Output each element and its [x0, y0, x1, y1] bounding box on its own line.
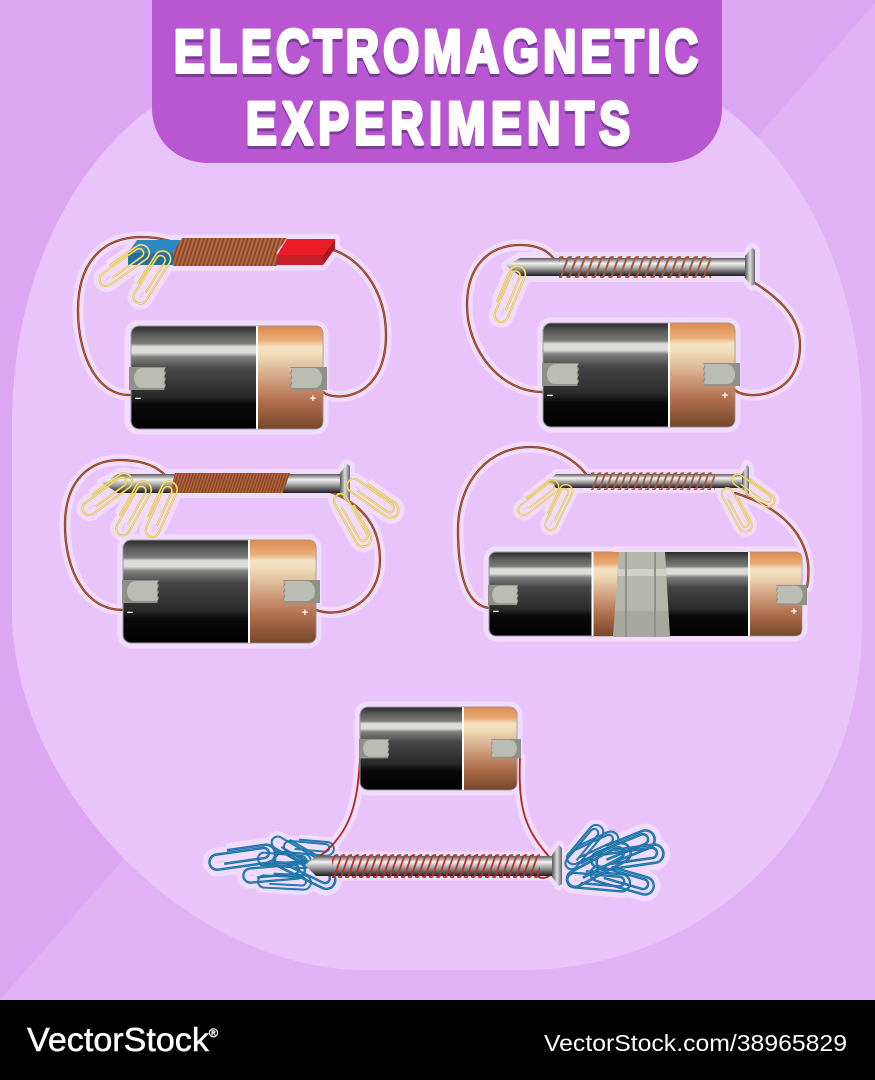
sticker outline: [208, 707, 665, 897]
battery: [129, 326, 327, 429]
battery: [542, 323, 740, 427]
central rounded panel: [12, 95, 862, 970]
nail: [548, 465, 749, 497]
battery: −: [127, 607, 133, 619]
title: ELECTROMAGNETIC: [174, 18, 698, 86]
blue paperclips left: [208, 832, 338, 892]
nail: [305, 845, 562, 886]
nail: [506, 248, 755, 286]
wires: [78, 237, 386, 396]
title: EXPERIMENTS: [246, 90, 630, 158]
battery: +: [722, 390, 728, 402]
paperclips: [95, 242, 174, 306]
two batteries taped together: [488, 552, 807, 637]
experiment 1: bar magnet electromagnet: [78, 237, 386, 429]
wires: [65, 460, 380, 613]
blue paperclips right: [561, 822, 665, 897]
footer logo: VectorStock: [27, 1021, 203, 1058]
wires: [320, 758, 554, 878]
bar magnet: [128, 239, 335, 265]
two batteries taped together: +: [791, 606, 797, 618]
sticker outline: [78, 237, 386, 429]
two batteries taped together: −: [493, 606, 499, 618]
footer logo: ®: [209, 1026, 218, 1040]
paperclip: [490, 264, 528, 324]
battery: −: [547, 390, 553, 402]
battery: [359, 707, 521, 790]
experiment 5: nail with many blue paperclips: [208, 707, 665, 897]
paperclips: [515, 470, 777, 534]
tape band: [613, 552, 670, 637]
battery: +: [310, 393, 316, 405]
title banner: [152, 0, 722, 163]
battery: −: [135, 393, 141, 405]
coil: [559, 256, 711, 278]
coil: [170, 473, 290, 493]
footer image id: VectorStock.com/38965829: [544, 1030, 847, 1056]
coil: [591, 472, 715, 490]
experiment 4: two batteries, four paperclips: [458, 447, 808, 637]
experiment 2: nail with one paperclip: [467, 245, 800, 427]
coil: [332, 854, 540, 878]
battery: +: [302, 607, 308, 619]
title: [174, 18, 698, 158]
battery: [122, 540, 320, 643]
wires: [467, 245, 800, 395]
wires: [458, 447, 808, 608]
paperclips: [78, 470, 402, 549]
sticker outline: [458, 447, 808, 636]
experiment 3: nail with five paperclips: [65, 460, 402, 643]
nail: [102, 464, 350, 502]
wire coil on magnet: [173, 238, 287, 266]
sticker outline: [65, 460, 402, 643]
sticker outline: [467, 245, 800, 427]
footer bar: [0, 1000, 875, 1080]
